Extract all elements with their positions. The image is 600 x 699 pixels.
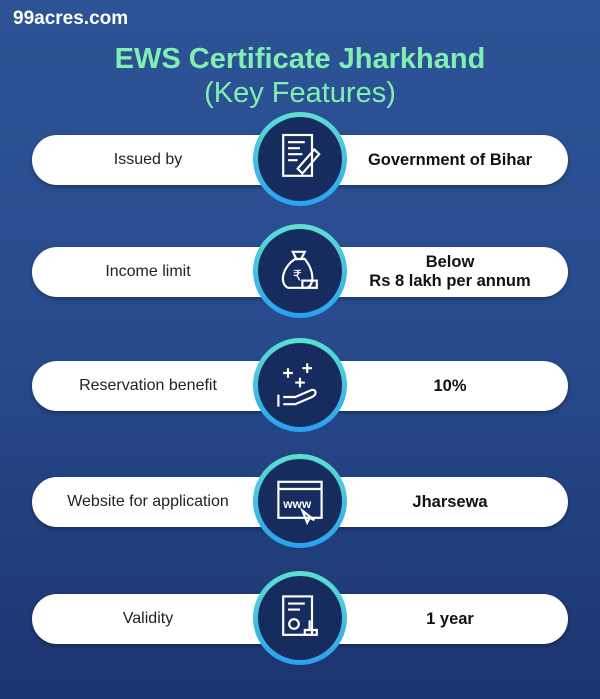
row: reservation: Reservation benefit [79, 377, 217, 394]
row: validity: 1 year [426, 610, 474, 628]
title: EWS Certificate Jharkhand [115, 43, 485, 75]
row: income [32, 247, 568, 297]
row: website: Website for application [67, 493, 229, 510]
icon: hand plus [253, 338, 347, 432]
row: validity: Validity [123, 610, 173, 627]
logo: 99acres.com [13, 8, 128, 29]
icon: money bag [253, 224, 347, 318]
icon: money bag: ₹ [293, 269, 302, 285]
row: validity [32, 594, 568, 644]
icon: www [253, 454, 347, 548]
icon: document [253, 112, 347, 206]
row: issued by: Government of Bihar [368, 150, 532, 168]
row: income: Income limit [105, 263, 191, 280]
row: website: Jharsewa [412, 492, 488, 510]
row: income: Below [426, 253, 474, 271]
row: reservation [32, 361, 568, 411]
icon: www: www [282, 497, 312, 511]
title: (Key Features) [204, 77, 396, 109]
title [115, 43, 485, 109]
row: reservation: 10% [433, 376, 467, 394]
row: income: Rs 8 lakh per annum [369, 272, 531, 290]
row: issued by: Issued by [114, 151, 182, 168]
row: website [32, 477, 568, 527]
row: issued by [32, 135, 568, 185]
icon: certificate stamp [253, 571, 347, 665]
